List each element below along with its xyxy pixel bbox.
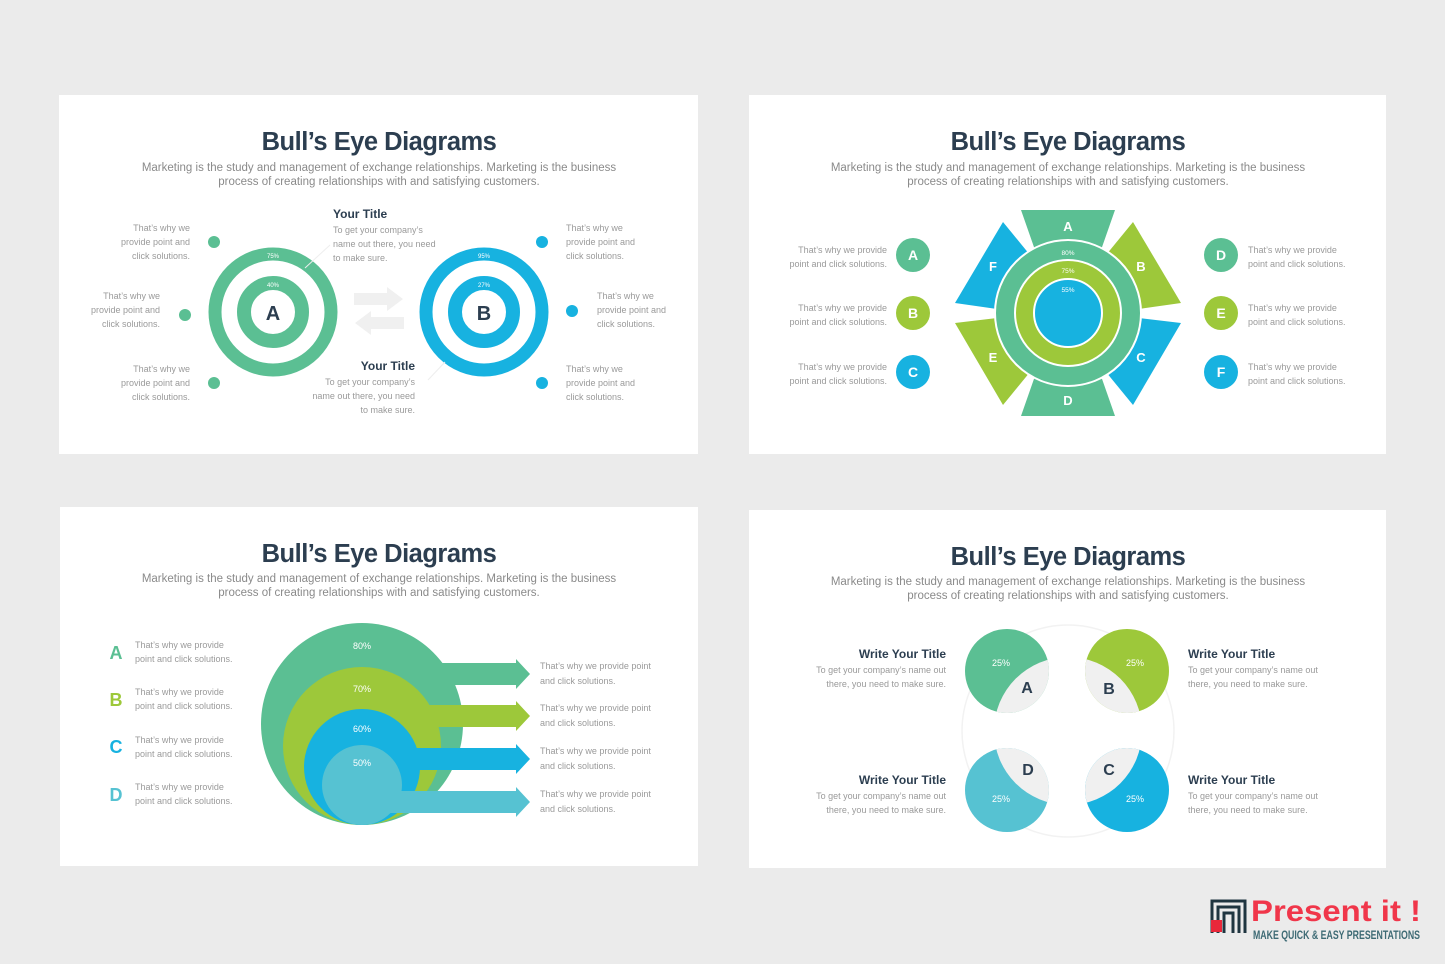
left legend A B C: point and click solutions.: [789, 259, 887, 269]
left legend: C: [110, 737, 122, 757]
bull's eye B: 95%: [478, 254, 491, 260]
left titles: To get your company’s name out: [816, 791, 946, 801]
left legend A B C: [789, 238, 930, 389]
bull's eye A: 75%: [267, 254, 280, 260]
right legend D E F: That’s why we provide: [1248, 303, 1337, 313]
right points B: provide point and: [597, 305, 666, 315]
hexagon segments: E: [989, 350, 998, 365]
right legend D E F: That’s why we provide: [1248, 362, 1337, 372]
callout: your title top: Your Title: [333, 207, 388, 221]
right texts: That’s why we provide point: [540, 746, 651, 756]
nested circles and arrows: [261, 623, 530, 825]
left points A: That’s why we: [133, 364, 190, 374]
right texts: That’s why we provide point: [540, 703, 651, 713]
title: Bull’s Eye Diagrams: [262, 128, 497, 156]
right points B: provide point and: [566, 237, 635, 247]
subtitle: Marketing is the study and management of exchange relationships. Marketing is the business: [142, 573, 616, 585]
right points B: click solutions.: [566, 392, 624, 402]
left points A: provide point and: [91, 305, 160, 315]
right texts: and click solutions.: [540, 761, 616, 771]
left legend: point and click solutions.: [135, 796, 233, 806]
bull's eye B: B: [477, 303, 491, 325]
right legend D E F: F: [1217, 364, 1226, 380]
left legend: point and click solutions.: [135, 701, 233, 711]
left titles: there, you need to make sure.: [826, 679, 946, 689]
left legend A B C: A: [908, 247, 918, 263]
subtitle: process of creating relationships with and satisfying customers.: [907, 590, 1229, 602]
quadrant pies: B: [1103, 681, 1115, 698]
subtitle: [831, 576, 1305, 602]
right points B: provide point and: [566, 378, 635, 388]
left legend: That’s why we provide: [135, 687, 224, 697]
concentric rings: 55%: [1061, 287, 1075, 294]
left legend A B C: That’s why we provide: [798, 362, 887, 372]
hexagon segments: D: [1063, 393, 1073, 408]
left legend A B C: point and click solutions.: [789, 376, 887, 386]
right titles: [1188, 647, 1318, 815]
right legend D E F: [1204, 238, 1346, 389]
left legend A B C: point and click solutions.: [789, 317, 887, 327]
quadrant pies: 25%: [1126, 794, 1144, 804]
left legend: That’s why we provide: [135, 640, 224, 650]
callout: your title bottom: to make sure.: [360, 405, 415, 415]
bull's eye A: 40%: [267, 283, 280, 289]
left legend A B C: That’s why we provide: [798, 245, 887, 255]
right legend D E F: point and click solutions.: [1248, 317, 1346, 327]
right points B: click solutions.: [597, 319, 655, 329]
callout: your title top: to make sure.: [333, 253, 388, 263]
title: Bull’s Eye Diagrams: [262, 540, 497, 568]
quadrant pies: D: [1022, 762, 1034, 779]
callout: your title bottom: [312, 359, 445, 415]
left legend: point and click solutions.: [135, 749, 233, 759]
right texts: and click solutions.: [540, 718, 616, 728]
bull's eye A: [215, 254, 331, 370]
left legend A B C: C: [908, 364, 918, 380]
right titles: there, you need to make sure.: [1188, 805, 1308, 815]
subtitle: [831, 162, 1305, 188]
left points A: click solutions.: [132, 392, 190, 402]
hexagon segments: C: [1136, 350, 1146, 365]
hexagon segments: [955, 210, 1181, 416]
quadrant pies: [962, 625, 1174, 837]
left points A: That’s why we: [133, 223, 190, 233]
right legend D E F: point and click solutions.: [1248, 259, 1346, 269]
hexagon segments: B: [1136, 259, 1146, 274]
right points B: That’s why we: [566, 364, 623, 374]
right titles: Write Your Title: [1188, 647, 1275, 661]
left legend: B: [110, 690, 122, 710]
callout: your title top: [305, 207, 436, 268]
left titles: Write Your Title: [859, 773, 946, 787]
left titles: there, you need to make sure.: [826, 805, 946, 815]
callout: your title bottom: To get your company’s: [325, 377, 415, 387]
title: Bull’s Eye Diagrams: [951, 128, 1186, 156]
left legend: [110, 640, 233, 806]
left titles: [816, 647, 946, 815]
nested circles and arrows: 60%: [353, 724, 371, 734]
title: Bull’s Eye Diagrams: [951, 543, 1186, 571]
right texts: [540, 661, 651, 814]
quadrant pies: 25%: [992, 658, 1010, 668]
nested circles and arrows: 50%: [353, 758, 371, 768]
left legend: That’s why we provide: [135, 782, 224, 792]
nested circles and arrows: 70%: [353, 684, 371, 694]
right legend D E F: point and click solutions.: [1248, 376, 1346, 386]
arrows: exchange: [354, 287, 404, 335]
right titles: To get your company’s name out: [1188, 791, 1318, 801]
subtitle: process of creating relationships with and satisfying customers.: [218, 176, 540, 188]
right points B: click solutions.: [566, 251, 624, 261]
concentric rings: 80%: [1061, 250, 1075, 257]
hexagon segments: F: [989, 259, 997, 274]
callout: your title top: To get your company’s: [333, 225, 423, 235]
left points A: provide point and: [121, 378, 190, 388]
bull's eye A: A: [266, 303, 280, 325]
right points B: That’s why we: [597, 291, 654, 301]
panel: top-right hexagon bull's eye: [749, 95, 1386, 454]
callout: your title bottom: Your Title: [361, 359, 415, 373]
right titles: To get your company’s name out: [1188, 665, 1318, 675]
bull's eye B: [426, 254, 542, 370]
right texts: That’s why we provide point: [540, 661, 651, 671]
quadrant pies: 25%: [992, 794, 1010, 804]
concentric rings: [995, 240, 1141, 386]
right legend D E F: That’s why we provide: [1248, 245, 1337, 255]
left legend: That’s why we provide: [135, 735, 224, 745]
callout: your title top: name out there, you need: [333, 239, 436, 249]
left points A: click solutions.: [132, 251, 190, 261]
right texts: That’s why we provide point: [540, 789, 651, 799]
bull's eye B: 27%: [478, 283, 491, 289]
left legend: A: [110, 643, 122, 663]
left titles: Write Your Title: [859, 647, 946, 661]
left points A: click solutions.: [102, 319, 160, 329]
concentric rings: 75%: [1061, 268, 1075, 275]
subtitle: Marketing is the study and management of exchange relationships. Marketing is the business: [142, 162, 616, 174]
subtitle: [142, 162, 616, 188]
quadrant pies: A: [1021, 680, 1033, 697]
subtitle: process of creating relationships with and satisfying customers.: [907, 176, 1229, 188]
right titles: Write Your Title: [1188, 773, 1275, 787]
right titles: there, you need to make sure.: [1188, 679, 1308, 689]
right texts: and click solutions.: [540, 804, 616, 814]
left points A: [91, 223, 220, 402]
subtitle: Marketing is the study and management of exchange relationships. Marketing is the business: [831, 162, 1305, 174]
right points B: [536, 223, 666, 402]
left legend A B C: B: [908, 305, 918, 321]
left legend: D: [110, 785, 122, 805]
left titles: To get your company’s name out: [816, 665, 946, 675]
left points A: provide point and: [121, 237, 190, 247]
quadrant pies: C: [1103, 762, 1115, 779]
subtitle: Marketing is the study and management of exchange relationships. Marketing is the business: [831, 576, 1305, 588]
hexagon segments: A: [1063, 219, 1073, 234]
quadrant pies: 25%: [1126, 658, 1144, 668]
left legend A B C: That’s why we provide: [798, 303, 887, 313]
panel: top-left two bull's eyes: [59, 95, 698, 454]
panel: bottom-right quadrant pies: [749, 510, 1386, 868]
right points B: That’s why we: [566, 223, 623, 233]
nested circles and arrows: 80%: [353, 641, 371, 651]
logo: Present it: [1211, 895, 1421, 942]
logo: Present it: Present it !: [1251, 895, 1421, 928]
left points A: That’s why we: [103, 291, 160, 301]
callout: your title bottom: name out there, you need: [312, 391, 415, 401]
right texts: and click solutions.: [540, 676, 616, 686]
right legend D E F: D: [1216, 247, 1226, 263]
subtitle: process of creating relationships with and satisfying customers.: [218, 587, 540, 599]
left legend: point and click solutions.: [135, 654, 233, 664]
panel: bottom-left nested circles with arrows: [60, 507, 698, 866]
subtitle: [142, 573, 616, 599]
right legend D E F: E: [1216, 305, 1226, 321]
